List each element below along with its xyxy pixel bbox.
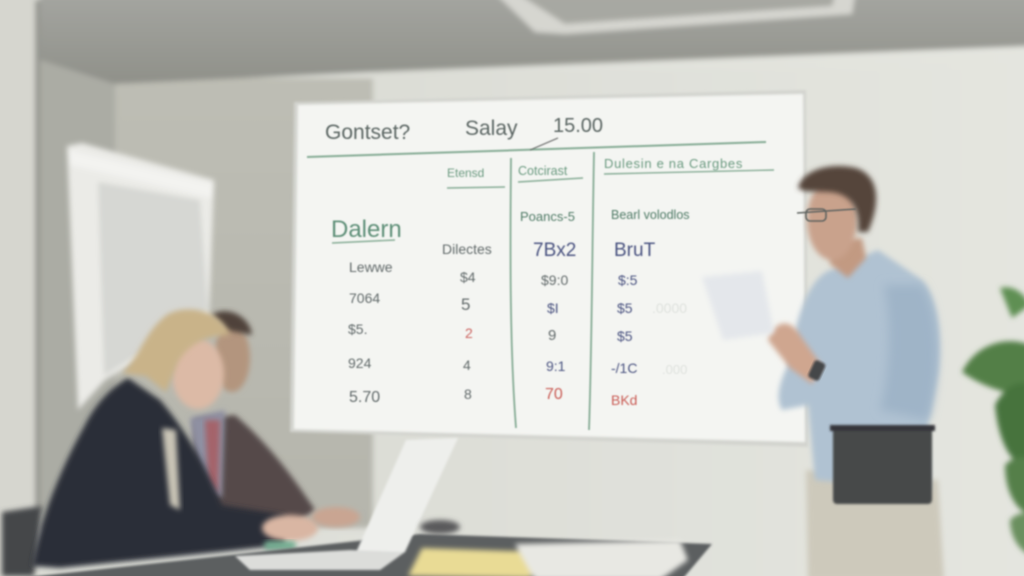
whiteboard table figures: 4 <box>463 357 471 373</box>
man jacket <box>195 415 315 530</box>
seated woman <box>2 309 360 576</box>
whiteboard table figures: 5 <box>461 295 470 314</box>
whiteboard title: 15.00 <box>553 115 603 137</box>
chair <box>2 506 42 576</box>
whiteboard table figures: .0000 <box>652 300 687 316</box>
whiteboard table figures: Lewwe <box>349 259 393 275</box>
standing presenter <box>702 166 944 576</box>
whiteboard column headers <box>331 156 743 243</box>
presenter shirt shading <box>880 285 937 420</box>
presenter glasses <box>797 209 856 221</box>
woman blouse <box>162 428 180 510</box>
whiteboard table figures: $:5 <box>618 272 638 288</box>
flip chart <box>67 143 214 410</box>
whiteboard table figures: 924 <box>348 355 372 371</box>
woman hair <box>122 309 230 392</box>
whiteboard column headers: Etensd <box>447 166 484 180</box>
whiteboard table figures: 70 <box>545 386 563 403</box>
whiteboard table figures: $5. <box>348 321 367 337</box>
table <box>20 534 712 576</box>
presenter shirt <box>779 250 939 490</box>
whiteboard table figures <box>348 240 687 408</box>
objects on table <box>408 520 688 576</box>
whiteboard table figures: $5 <box>617 300 633 316</box>
man tie and shirt <box>190 410 225 498</box>
seated man <box>190 311 315 530</box>
whiteboard table figures: $I <box>547 300 559 316</box>
woman hands <box>262 515 318 541</box>
presenter head <box>807 180 857 260</box>
whiteboard table figures: 7Bx2 <box>533 240 576 261</box>
whiteboard column headers: Cotcirast <box>518 164 568 178</box>
whiteboard table figures: -/1C <box>611 360 637 376</box>
presenter forearm <box>768 324 822 384</box>
whiteboard title <box>325 115 603 144</box>
whiteboard table figures: 2 <box>465 325 473 341</box>
man face <box>214 324 250 392</box>
whiteboard table figures: .000 <box>662 362 687 377</box>
whiteboard table figures: $5 <box>617 328 633 344</box>
whiteboard column headers: Bearl volodlos <box>611 208 690 222</box>
whiteboard frame <box>290 90 808 447</box>
whiteboard column headers: Dulesin e na Cargbes <box>604 156 743 171</box>
whiteboard table figures: BKd <box>611 392 637 408</box>
whiteboard table figures: $9:0 <box>541 272 568 288</box>
whiteboard rules <box>307 138 774 430</box>
presenter neck <box>830 238 866 278</box>
whiteboard table figures: 8 <box>464 386 472 402</box>
whiteboard table figures: Dilectes <box>442 241 492 257</box>
presenter hair <box>798 166 876 232</box>
woman jacket <box>32 378 285 568</box>
whiteboard title: Gontset? <box>325 121 410 144</box>
presenter trousers <box>806 470 944 576</box>
presenter watch <box>807 359 826 382</box>
whiteboard title: Salay <box>465 117 518 140</box>
whiteboard table figures: BruT <box>614 240 656 261</box>
laptop <box>235 438 458 570</box>
presenter tablet <box>830 425 935 504</box>
whiteboard column headers: Poancs-5 <box>520 209 575 224</box>
whiteboard table figures: 9 <box>548 327 556 344</box>
whiteboard table figures: 9:1 <box>546 358 566 374</box>
whiteboard table figures: 7064 <box>349 290 380 306</box>
whiteboard table figures: $4 <box>460 269 476 285</box>
presenter paper <box>702 271 774 340</box>
whiteboard column headers: Dalern <box>331 216 402 243</box>
whiteboard <box>290 90 808 447</box>
man hair <box>212 311 252 335</box>
whiteboard table figures: 5.70 <box>349 389 380 406</box>
woman face <box>172 339 224 409</box>
plant <box>962 287 1024 555</box>
